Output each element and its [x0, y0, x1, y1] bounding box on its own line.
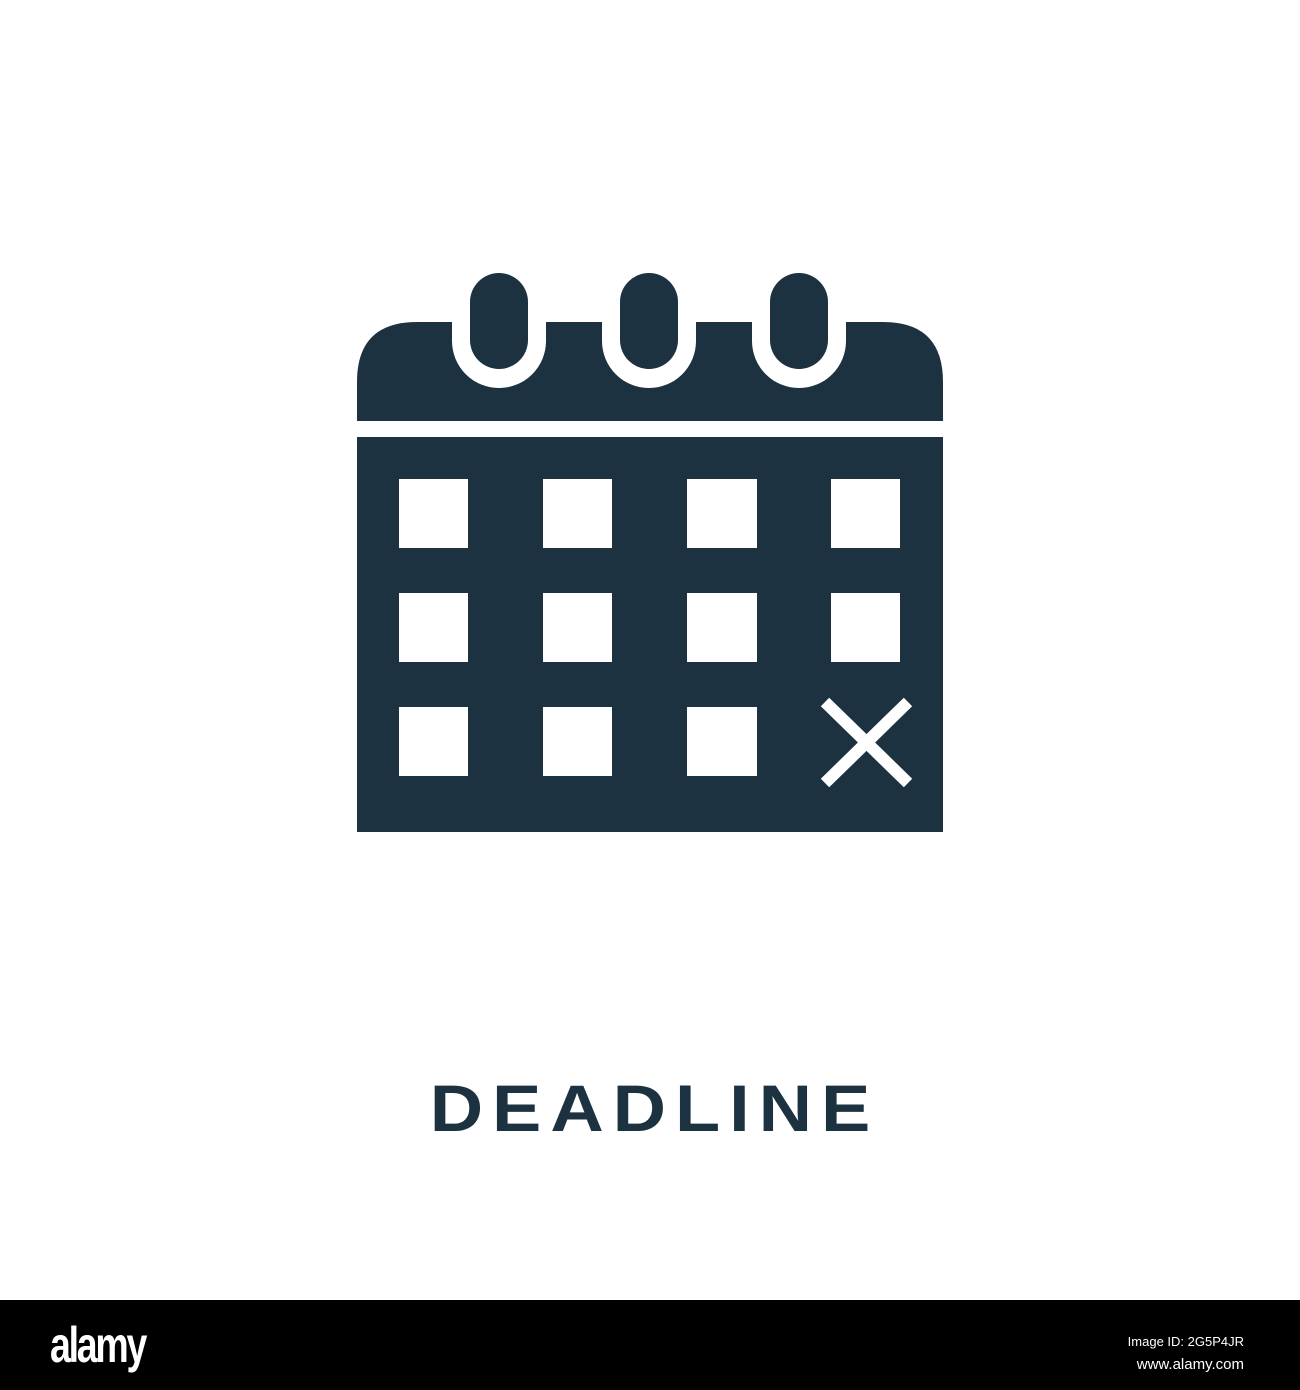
image id text: www.alamy.com	[1137, 1356, 1244, 1373]
image id text	[1128, 1334, 1244, 1373]
calendar header	[357, 322, 943, 421]
icon: deadline calendar	[357, 273, 943, 832]
footer bar	[0, 1300, 1300, 1390]
image id text: Image ID: 2G5P4JR	[1128, 1334, 1244, 1349]
title: DEADLINE: DEADLINE	[430, 1071, 879, 1145]
logo: alamy: alamy	[50, 1317, 145, 1373]
deadline cross	[825, 702, 908, 783]
rings	[452, 260, 846, 388]
day grid	[399, 479, 900, 776]
calendar body	[357, 437, 943, 832]
